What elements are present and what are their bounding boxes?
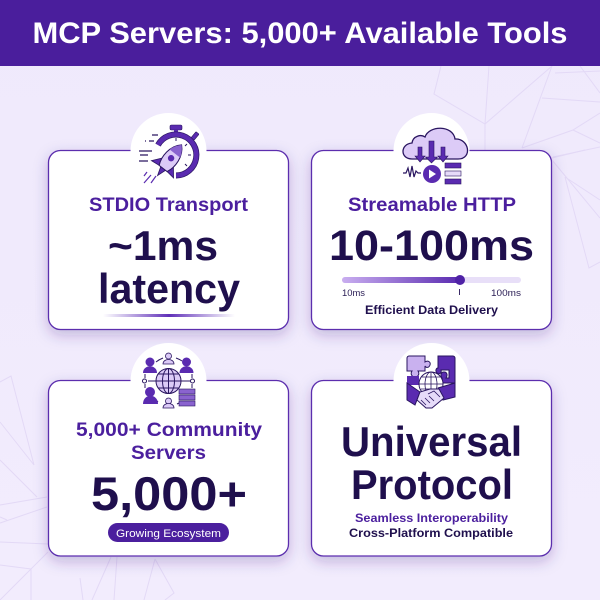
underline accent [103,314,235,317]
metric: 10-100ms: 10-100ms [329,222,534,270]
panel: Streamable HTTP [312,113,552,330]
slider label: 100ms: 100ms [491,288,521,299]
icon: puzzle handshake globe [394,343,470,419]
icon: global network [130,343,206,419]
panel: STDIO Transport [48,113,288,330]
metric: latency: latency [98,265,241,312]
heading: 5,000+ Community Servers [76,420,262,464]
heading: Universal Protocol [341,418,522,508]
latency slider [342,275,521,299]
metric: ~1ms: ~1ms [108,222,218,269]
header banner [0,0,600,66]
icon: rocket stopwatch [130,113,206,189]
caption: Efficient Data Delivery: Efficient Data Delivery [365,303,498,317]
badge: Growing Ecosystem: Growing Ecosystem [116,528,221,540]
panel: Universal Protocol [312,343,552,556]
title: MCP Servers: 5,000+ Available Tools [32,17,568,50]
caption: Seamless Interoperability: Seamless Interoperability [355,511,508,525]
heading: Universal Protocol: Protocol [351,461,513,508]
heading: STDIO Transport: STDIO Transport [89,195,249,216]
metric: 5,000+: 5,000+ [91,467,247,520]
badge: Growing Ecosystem [108,523,229,542]
heading: Universal Protocol: Universal [341,418,522,465]
heading: Streamable HTTP: Streamable HTTP [348,195,516,216]
heading: 5,000+ Community Servers: 5,000+ Community [76,420,262,441]
icon: cloud streaming [394,113,470,189]
panel: Community Servers [48,343,288,556]
heading: 5,000+ Community Servers: Servers [131,443,206,464]
caption: Cross-Platform Compatible: Cross-Platform Compatible [349,526,513,540]
slider label: 10ms: 10ms [342,288,365,299]
